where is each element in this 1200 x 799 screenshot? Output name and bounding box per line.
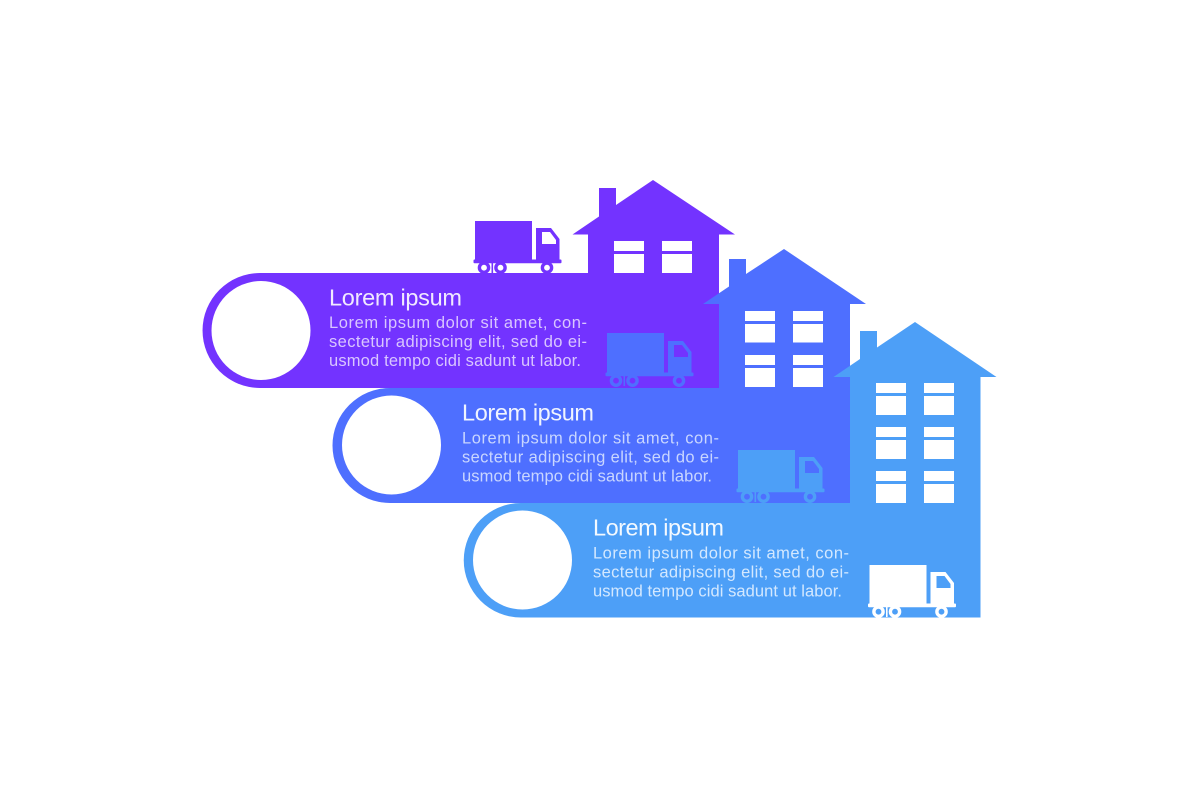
circle placeholder 2: [342, 396, 441, 494]
body text 1: Lorem ipsum dolor sit amet, con-: [329, 314, 587, 332]
panel 1: [203, 273, 719, 388]
body text 3: Lorem ipsum dolor sit amet, con-: [593, 544, 849, 562]
house 1: [572, 180, 735, 388]
heading 1: Lorem ipsum: [329, 284, 462, 310]
circle placeholder 3: [473, 510, 572, 610]
body text 1: [329, 314, 587, 370]
truck 1: purple on white: [474, 221, 562, 273]
circle placeholder 1: [212, 281, 310, 380]
truck 4: white on light blue: [868, 565, 956, 617]
truck 2: blue on purple: [606, 333, 694, 386]
body text 3: usmod tempo cidi sadunt ut labor.: [593, 582, 842, 600]
truck 3: light blue on blue: [736, 450, 824, 502]
body text 2: usmod tempo cidi sadunt ut labor.: [462, 468, 712, 486]
house 3: [834, 322, 996, 618]
heading 2: Lorem ipsum: [462, 400, 594, 426]
heading 3: Lorem ipsum: [593, 514, 724, 540]
body text 2: sectetur adipiscing elit, sed do ei-: [462, 448, 719, 466]
panel 2: [332, 388, 850, 503]
body text 2: Lorem ipsum dolor sit amet, con-: [462, 430, 719, 448]
house 2: [703, 249, 866, 503]
body text 1: usmod tempo cidi sadunt ut labor.: [329, 352, 581, 370]
body text 3: sectetur adipiscing elit, sed do ei-: [593, 564, 849, 582]
panel 3: [464, 503, 981, 618]
body text 3: [593, 544, 849, 600]
body text 1: sectetur adipiscing elit, sed do ei-: [329, 333, 587, 351]
body text 2: [462, 430, 719, 486]
